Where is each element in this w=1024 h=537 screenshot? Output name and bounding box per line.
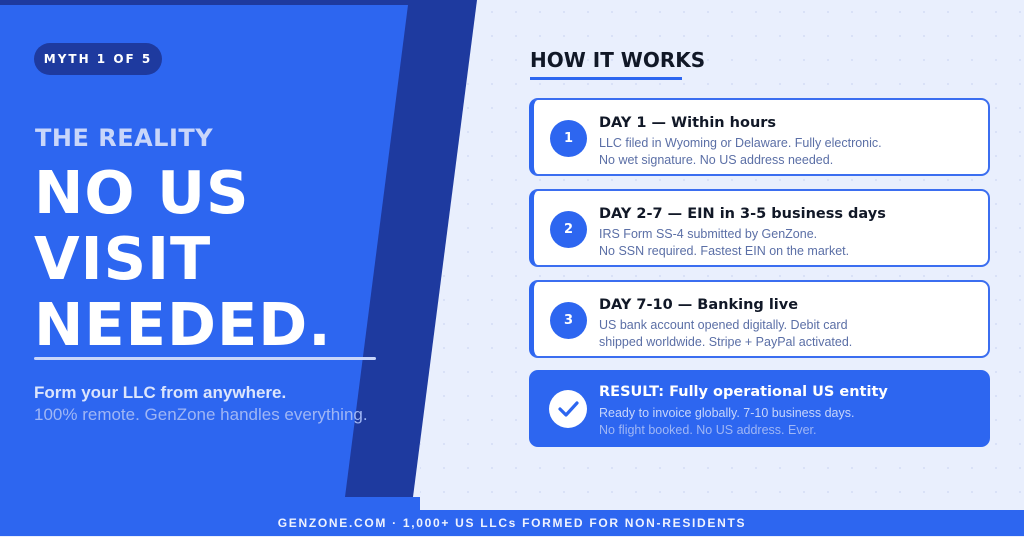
tagline [34, 383, 368, 424]
tagline: 100% remote. GenZone handles everything. [34, 405, 368, 424]
result text: No flight booked. No US address. Ever. [599, 423, 816, 437]
card text: US bank account opened digitally. Debit card [599, 318, 848, 332]
headline: NEEDED. [34, 290, 332, 359]
card text [599, 318, 852, 349]
result card [529, 370, 990, 447]
footer: GENZONE.COM · 1,000+ US LLCs FORMED FOR NON-RESIDENTS [278, 516, 746, 530]
badge: myth 1 of 5 [34, 43, 162, 75]
card text: LLC filed in Wyoming or Delaware. Fully electronic. [599, 136, 882, 150]
icon: step 2 [550, 211, 587, 248]
badge: myth 1 of 5: MYTH 1 OF 5 [44, 52, 152, 66]
icon: step 1 [550, 120, 587, 157]
icon: step 3 [550, 302, 587, 339]
headline [34, 158, 332, 359]
subheading: the reality: THE REALITY [35, 124, 213, 152]
result text [599, 406, 854, 437]
card title: DAY 7-10 — Banking live [599, 297, 798, 313]
icon: step 2: 2 [564, 222, 573, 237]
heading underline [530, 77, 682, 80]
card text: No SSN required. Fastest EIN on the market. [599, 244, 849, 258]
headline: VISIT [34, 224, 211, 293]
footer [0, 510, 1024, 536]
card text: No wet signature. No US address needed. [599, 153, 833, 167]
icon: step 1: 1 [564, 131, 573, 146]
card title: DAY 1 — Within hours [599, 115, 776, 131]
result text: Ready to invoice globally. 7-10 business days. [599, 406, 854, 420]
card: day 7-10 [529, 280, 990, 358]
underline [34, 357, 376, 360]
icon: step 3: 3 [564, 313, 573, 328]
card text [599, 227, 849, 258]
card title: DAY 2-7 — EIN in 3-5 business days [599, 206, 886, 222]
card text: IRS Form SS-4 submitted by GenZone. [599, 227, 817, 241]
headline: NO US [34, 158, 249, 227]
card text [599, 136, 882, 167]
icon: checkmark [549, 390, 587, 428]
card: day 1 [529, 98, 990, 176]
heading: how it works: HOW IT WORKS [530, 48, 705, 72]
result title: RESULT: Fully operational US entity [599, 384, 888, 400]
card: day 2-7 [529, 189, 990, 267]
card text: shipped worldwide. Stripe + PayPal activated. [599, 335, 852, 349]
tagline: Form your LLC from anywhere. [34, 383, 286, 402]
